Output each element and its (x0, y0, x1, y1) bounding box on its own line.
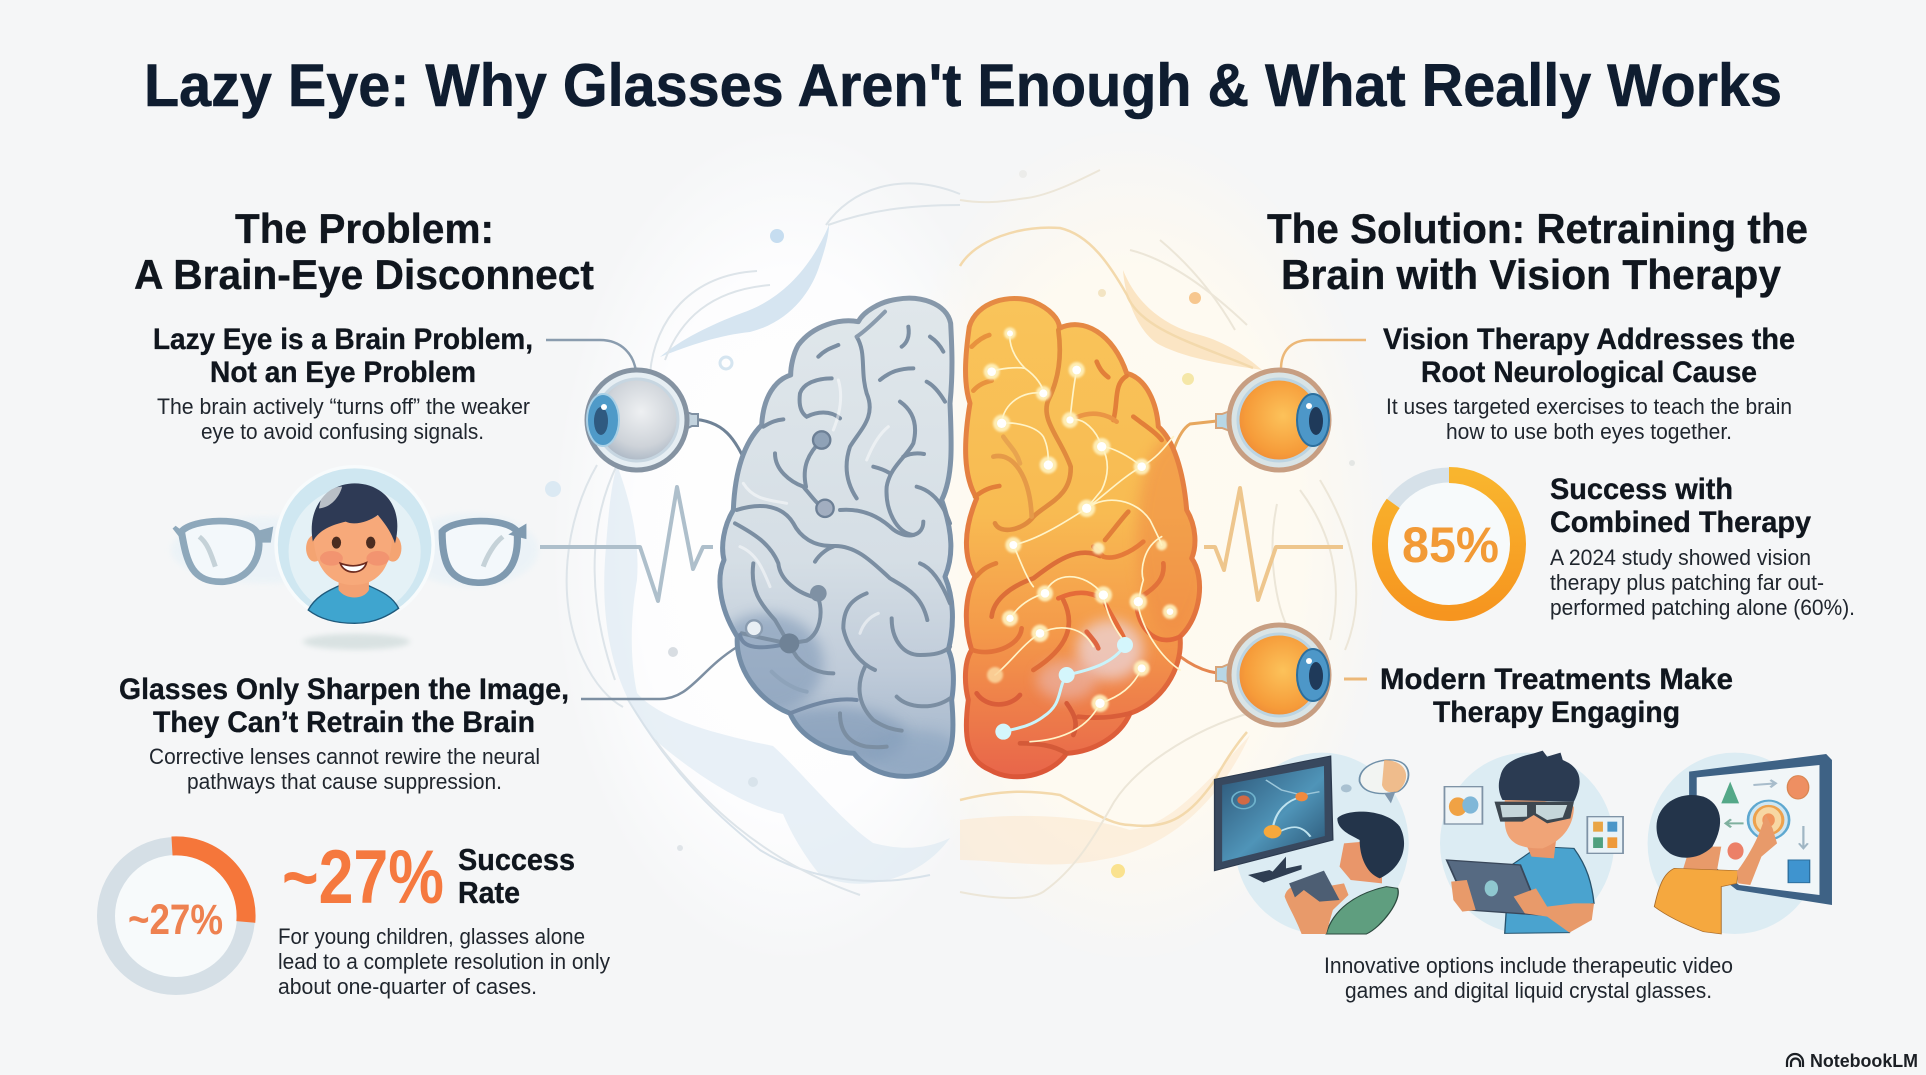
heading: the problem: A Brain-Eye Disconnect (134, 251, 594, 298)
text block: brain problem: Not an Eye Problem (210, 356, 476, 389)
text block: glasses only: pathways that cause suppression. (187, 769, 502, 794)
icon: orange eye lower right (1216, 625, 1329, 725)
brain (710, 298, 1210, 777)
text block: success rate detail (278, 924, 610, 999)
heading: the problem: The Problem: (235, 205, 494, 252)
stat: 27% success rate: ~27% (282, 835, 444, 920)
connector: eye to right brain upper (1160, 421, 1217, 533)
ecg line left (540, 487, 713, 601)
text block: innovative options: Innovative options include therapeutic video (1324, 953, 1733, 978)
connector: modern treatments callout (1344, 678, 1367, 680)
left hemisphere (710, 298, 960, 777)
background waves: blue (567, 183, 960, 895)
text block: root cause: how to use both eyes together. (1446, 419, 1732, 444)
text block: success rate detail: For young children, glasses alone (278, 924, 585, 949)
illustrations: therapy scenes (1215, 751, 1832, 934)
heading: modern treatments (1380, 663, 1733, 729)
text block: success rate detail: about one-quarter of cases. (278, 974, 537, 999)
text block: combined therapy: Success with (1550, 473, 1733, 506)
text block: root cause: It uses targeted exercises to teach the brain (1386, 394, 1792, 419)
heading: the solution (1267, 205, 1808, 298)
stat: 27% success rate: Rate (458, 875, 520, 910)
text block: brain problem (153, 323, 533, 444)
stat: 27% success rate (282, 835, 575, 920)
connector: vision therapy callout (1281, 340, 1366, 369)
heading: the problem (134, 205, 594, 298)
scene: vr glasses and tablet (1440, 751, 1623, 934)
chart: 85% donut (1380, 475, 1518, 613)
text block: root cause: Root Neurological Cause (1421, 356, 1757, 389)
text block: combined therapy: A 2024 study showed vision (1550, 545, 1811, 570)
icon: boy with glasses (171, 465, 539, 650)
text block: glasses only: They Can’t Retrain the Brain (153, 706, 535, 739)
text block: success rate detail: lead to a complete resolution in only (278, 949, 610, 974)
chart: 27% donut: ~27% (128, 896, 223, 944)
connector: eye to left brain (690, 419, 765, 503)
text block: combined therapy: therapy plus patching far out- (1550, 570, 1824, 595)
heading: modern treatments: Modern Treatments Make (1380, 663, 1733, 696)
watermark: NotebookLM: NotebookLM (1810, 1051, 1918, 1071)
chart: 85% donut: 85% (1402, 517, 1499, 573)
text block: glasses only: Glasses Only Sharpen the Image, (119, 673, 569, 706)
icon: orange eye upper right (1216, 370, 1329, 470)
text block: innovative options (1324, 953, 1733, 1003)
text block: glasses only: Corrective lenses cannot rewire the neural (149, 744, 540, 769)
text block: glasses only (119, 673, 569, 794)
icon: grey eye left (587, 370, 698, 470)
text block: combined therapy (1550, 473, 1855, 620)
heading: the solution: Brain with Vision Therapy (1281, 251, 1782, 298)
text block: combined therapy: Combined Therapy (1550, 506, 1811, 539)
connector: lower callout (581, 647, 737, 699)
scene: touch screen (1648, 753, 1832, 934)
left hemisphere nodes (746, 431, 834, 653)
right hemisphere (965, 299, 1210, 777)
chart: 27% donut (106, 846, 246, 986)
background waves: orange (960, 170, 1356, 898)
connector: top callout (546, 340, 636, 372)
scene: video game (1215, 753, 1409, 934)
ecg line right (1204, 488, 1343, 600)
heading: modern treatments: Therapy Engaging (1433, 696, 1680, 729)
floating dots (545, 170, 1355, 878)
text block: root cause: Vision Therapy Addresses the (1383, 323, 1795, 356)
text block: brain problem: The brain actively “turns off” the weaker (157, 394, 530, 419)
text block: root cause (1383, 323, 1795, 444)
connector: eye to right brain lower (1138, 610, 1217, 673)
stat: 27% success rate: Success (458, 842, 575, 877)
title: Lazy Eye: Why Glasses Aren't Enough & What Really Works (144, 52, 1782, 119)
text block: brain problem: eye to avoid confusing signals. (201, 419, 484, 444)
text block: innovative options: games and digital liquid crystal glasses. (1345, 978, 1712, 1003)
panel: the problem (106, 205, 737, 999)
heading: the solution: The Solution: Retraining the (1267, 205, 1808, 252)
panel: the solution (1215, 205, 1855, 1003)
text block: combined therapy: performed patching alone (60%). (1550, 595, 1855, 620)
neural glow network (984, 327, 1180, 742)
text block: brain problem: Lazy Eye is a Brain Problem, (153, 323, 533, 356)
